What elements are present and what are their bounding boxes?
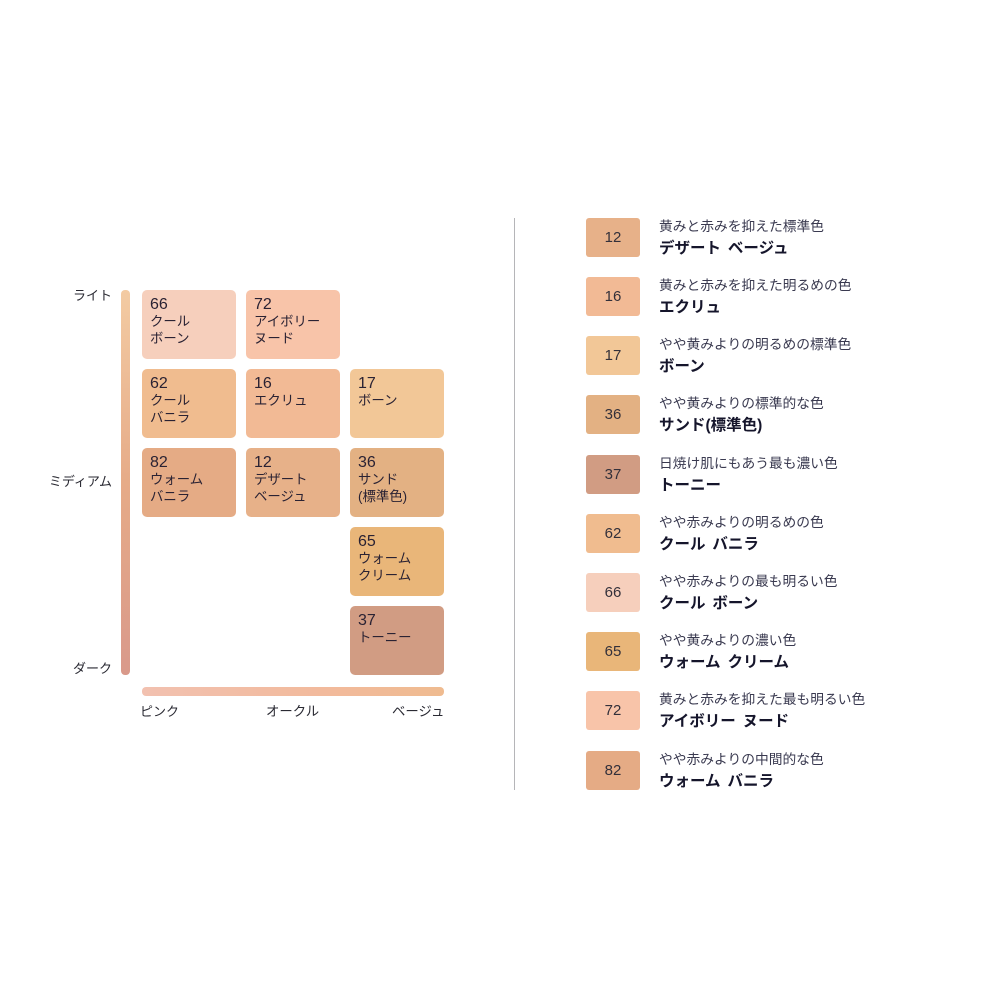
tile: 12 desert beige: デザート [254, 472, 308, 487]
tile: 12 desert beige: 12 [254, 454, 272, 471]
legend row: 66: 66 [605, 584, 621, 601]
legend row: 66: やや赤みよりの最も明るい色 [659, 574, 837, 589]
tile: 72 ivory nude [246, 290, 340, 359]
tile: 37 tawny [350, 606, 444, 675]
tile: 65 warm cream: 65 [358, 533, 376, 550]
tile: 72 ivory nude: 72 [254, 296, 272, 313]
legend row: 82: ウォーム バニラ [659, 773, 774, 790]
tile: 37 tawny: 37 [358, 612, 376, 629]
legend row: 12 [586, 218, 824, 257]
legend row: 17: ボーン [659, 358, 705, 375]
tile: 62 cool vanilla: バニラ [150, 410, 190, 425]
tile: 72 ivory nude: アイボリー [254, 314, 320, 329]
legend row: 37: 37 [605, 466, 621, 483]
tile: 65 warm cream [350, 527, 444, 596]
legend row: 17: やや黄みよりの明るめの標準色 [659, 337, 851, 352]
legend row: 82: 82 [605, 762, 621, 779]
tile: 66 cool bone [142, 290, 236, 359]
legend row: 12: 黄みと赤みを抑えた標準色 [659, 219, 824, 234]
tile: 16 ecru: 16 [254, 375, 272, 392]
horizontal axis: pink to beige [142, 687, 444, 696]
axis label: dark: ダーク [73, 661, 112, 676]
tile: 16 ecru [246, 369, 340, 438]
legend row: 12: デザート ベージュ [659, 240, 789, 257]
tile: 36 sand [350, 448, 444, 517]
tile: 36 sand: サンド [358, 472, 398, 487]
legend row: 72: アイボリー ヌード [659, 713, 789, 730]
legend row: 62: やや赤みよりの明るめの色 [659, 515, 824, 530]
legend row: 62 [586, 514, 824, 553]
center divider [514, 218, 515, 790]
tile: 36 sand: 36 [358, 454, 376, 471]
tile: 12 desert beige [246, 448, 340, 517]
tile: 62 cool vanilla: 62 [150, 375, 168, 392]
tile: 17 bone [350, 369, 444, 438]
legend row: 37 [586, 455, 838, 494]
legend row: 16: エクリュ [659, 299, 721, 316]
legend row: 16 [586, 277, 852, 316]
legend row: 37: トーニー [659, 477, 721, 494]
tile: 17 bone: ボーン [358, 393, 398, 408]
vertical axis: light to dark [121, 290, 130, 675]
legend row: 66 [586, 573, 837, 612]
tile: 62 cool vanilla: クール [150, 393, 190, 408]
legend row: 17 [586, 336, 851, 375]
tile: 82 warm vanilla: ウォーム [150, 472, 203, 487]
tile: 12 desert beige: ベージュ [254, 489, 306, 504]
axis label: light: ライト [73, 288, 112, 303]
tile: 16 ecru: エクリュ [254, 393, 308, 408]
axis label: medium: ミディアム [49, 474, 112, 489]
legend row: 65: ウォーム クリーム [659, 654, 789, 671]
legend row: 62: 62 [605, 525, 621, 542]
tile: 66 cool bone: 66 [150, 296, 168, 313]
tile: 36 sand: (標準色) [358, 489, 407, 504]
legend row: 36: サンド(標準色) [659, 417, 762, 434]
legend row: 36: やや黄みよりの標準的な色 [659, 396, 824, 411]
tile: 66 cool bone: ボーン [150, 331, 190, 346]
axis label: beige: ベージュ [392, 704, 444, 719]
legend row: 82: やや赤みよりの中間的な色 [659, 752, 824, 767]
legend row: 12: 12 [605, 229, 621, 246]
legend row: 65 [586, 632, 796, 671]
legend row: 62: クール バニラ [659, 536, 759, 553]
tile: 82 warm vanilla [142, 448, 236, 517]
legend row: 72: 72 [605, 702, 621, 719]
legend row: 16: 16 [605, 288, 621, 305]
legend row: 72 [586, 691, 865, 730]
tile: 65 warm cream: クリーム [358, 568, 411, 583]
legend row: 65: 65 [605, 643, 621, 660]
legend row: 16: 黄みと赤みを抑えた明るめの色 [659, 278, 852, 293]
legend row: 66: クール ボーン [659, 595, 758, 612]
legend row: 65: やや黄みよりの濃い色 [659, 633, 796, 648]
axis label: pink: ピンク [140, 704, 179, 719]
legend row: 37: 日焼け肌にもあう最も濃い色 [659, 456, 838, 471]
axis label: ochre: オークル [266, 704, 319, 719]
tile: 82 warm vanilla: バニラ [150, 489, 190, 504]
tile: 62 cool vanilla [142, 369, 236, 438]
legend row: 72: 黄みと赤みを抑えた最も明るい色 [659, 692, 865, 707]
tile: 17 bone: 17 [358, 375, 376, 392]
legend row: 36 [586, 395, 824, 434]
tile: 72 ivory nude: ヌード [254, 331, 294, 346]
tile: 82 warm vanilla: 82 [150, 454, 168, 471]
tile: 37 tawny: トーニー [358, 630, 412, 645]
legend row: 82 [586, 751, 824, 790]
tile: 66 cool bone: クール [150, 314, 190, 329]
tile: 65 warm cream: ウォーム [358, 551, 411, 566]
legend row: 17: 17 [605, 347, 621, 364]
legend row: 36: 36 [605, 406, 621, 423]
